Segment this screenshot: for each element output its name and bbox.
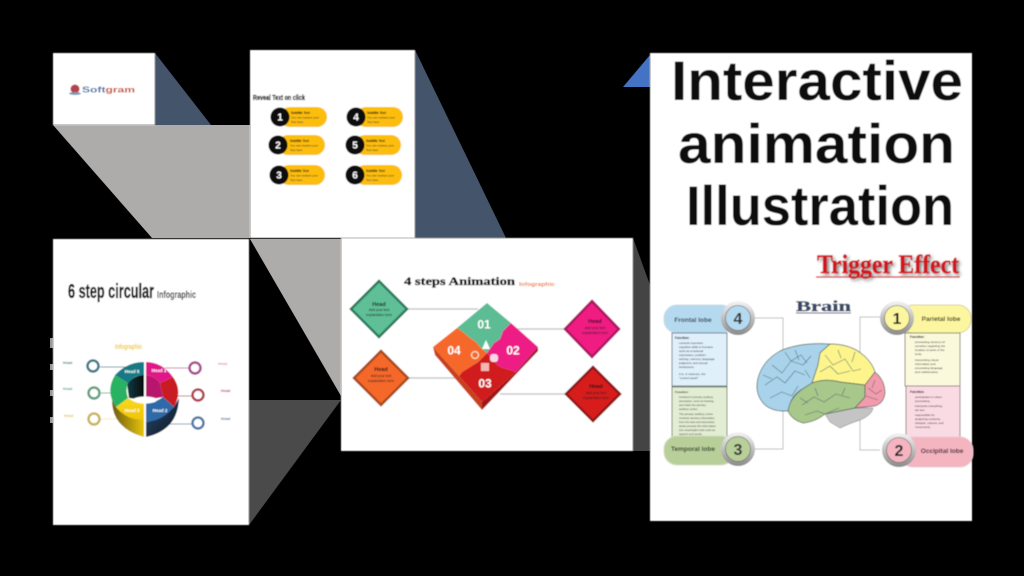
side labels: Head (63, 361, 73, 365)
panel: logo slide (53, 53, 155, 125)
step 1: Subtitle Text (291, 111, 311, 115)
side labels: Head (218, 362, 228, 366)
frontal lobe card: It is, in essence, the (679, 372, 706, 376)
connector shape: blue triangle (623, 55, 650, 87)
callout: red diamond: Add your text (586, 391, 606, 395)
temporal lobe card: and holds the primary (679, 403, 706, 407)
occipital lobe card: Function: (910, 390, 925, 394)
step 3: Subtitle Text (290, 169, 310, 173)
chart: central 4 part diamond: 03 (478, 376, 492, 390)
step 2: Text here (290, 148, 303, 152)
frontal lobe card: solving, memory, language (679, 357, 715, 361)
callout: orange diamond: explanation here (368, 379, 394, 383)
step 5: Subtitle Text (366, 139, 386, 143)
side labels: Head (64, 414, 74, 418)
step 2 (268, 135, 325, 155)
occipital lobe card: analyzing contents, (915, 417, 941, 421)
trigger effect subtitle: Trigger Effect (817, 250, 959, 279)
panel: interactive animation illustration (650, 49, 973, 521)
parietal lobe card: processing sensory inf (915, 340, 945, 344)
icon: logo globe (69, 84, 81, 95)
chart: 3D ring: Head 1 (152, 368, 167, 373)
occipital lobe card: processing (915, 399, 930, 403)
step 4: 4 (353, 112, 359, 124)
step 1 (270, 107, 327, 127)
parietal lobe card: location of parts of the (915, 348, 945, 352)
chart: 3D ring: Head 5 (125, 369, 140, 374)
callout: pink diamond: explanation here (582, 331, 608, 335)
step 6 (346, 165, 402, 185)
chart: central 4 part diamond (433, 303, 538, 410)
panel: 4 steps animation slide (341, 238, 633, 451)
occipital lobe card: 2 (895, 443, 904, 460)
step 1: You can replace your (291, 116, 319, 120)
chart: central 4 part diamond: 01 (477, 318, 491, 332)
callout: red diamond (566, 367, 620, 421)
title: animation (678, 112, 955, 175)
temporal lobe card: into meaningful units such as (679, 428, 716, 432)
occipital lobe card: participates in vision (915, 395, 942, 399)
callout: red diamond: Head (589, 384, 603, 390)
callout: orange diamond: Head (374, 367, 388, 373)
parietal lobe card: information and (915, 362, 936, 366)
step 3: Text here (290, 178, 303, 182)
temporal lobe card (664, 387, 755, 466)
title (671, 49, 963, 237)
heading: brain: Brain (796, 299, 852, 315)
callout: green diamond: explanation here (366, 313, 392, 317)
temporal lobe card: 3 (734, 442, 743, 459)
illustration: brain (757, 344, 885, 428)
step 1: 1 (277, 112, 283, 124)
step 6: Subtitle Text (366, 169, 386, 173)
connector lines (755, 317, 880, 450)
parietal lobe card: body (915, 352, 922, 356)
step 4: You can replace your (367, 116, 395, 120)
frontal lobe card: 4 (734, 311, 743, 328)
chart: 3D ring: Head 3 (125, 408, 140, 413)
step 4: Subtitle Text (367, 111, 387, 115)
connector shape: gray triangle (250, 239, 341, 396)
callout: green diamond: Head (372, 302, 386, 308)
side labels (63, 361, 231, 421)
chart: central 4 part diamond: 04 (447, 344, 461, 358)
callout: orange diamond (354, 351, 408, 405)
temporal lobe card: Temporal lobe (671, 446, 715, 453)
step 6: Text here (366, 178, 379, 182)
heading: brain (796, 299, 852, 315)
title: Interactive (671, 49, 963, 112)
panel: 6 step circular slide (53, 239, 249, 525)
step 3: 3 (276, 170, 282, 182)
step 5: Text here (366, 148, 379, 152)
heading: 6 step circular: 6 step circular (68, 281, 154, 303)
frontal lobe card: expression, problem (679, 353, 707, 357)
temporal lobe card: Involved in primary auditory (679, 395, 714, 399)
logo wordmark: Soft gram (82, 86, 135, 94)
connector shape: gray band (53, 125, 250, 238)
step 2: Subtitle Text (290, 139, 310, 143)
parietal lobe card: ormation regarding the (915, 344, 946, 348)
frontal lobe card: controls important (679, 341, 703, 345)
temporal lobe card: Function: (675, 390, 689, 394)
frontal lobe card: Frontal lobe (674, 317, 712, 324)
chart: 3D ring: Head 2 (153, 408, 168, 413)
callout: red diamond: explanation here (583, 396, 609, 400)
icon badges (88, 360, 204, 428)
temporal lobe card: areas process the information (679, 424, 716, 428)
parietal lobe card: Parietal lobe (922, 316, 961, 323)
temporal lobe card: receives sensory information (679, 416, 715, 420)
callout: pink diamond (565, 301, 619, 357)
leader lines (100, 367, 192, 424)
heading: 4 steps animation: 4 steps Animation (404, 274, 515, 288)
callout: pink diamond: Add your text (585, 326, 605, 330)
occipital lobe card: responsible for (915, 413, 935, 417)
parietal lobe card: and mathematics. (915, 370, 939, 374)
step 1: Text here (291, 120, 304, 124)
connector lines (405, 309, 567, 394)
callout: green diamond: Add your text (369, 308, 389, 312)
temporal lobe card: The primary auditory cortex (679, 412, 714, 416)
connector shape: dark gray right of steps slide (633, 238, 650, 451)
occipital lobe card (882, 386, 973, 467)
occipital lobe card: (shapes, colours, and (915, 421, 944, 425)
frontal lobe card: cognitive skills in humans (679, 345, 713, 349)
callout: pink diamond: Head (588, 319, 602, 325)
connector shape: slate from reveal slide (415, 50, 506, 238)
frontal lobe card: such as emotional (679, 349, 704, 353)
title: Illustration (686, 174, 954, 237)
frontal lobe card: "control panel" (679, 376, 698, 380)
label: yellow infographic: Infographic (115, 344, 142, 351)
parietal lobe card (880, 301, 971, 386)
occipital lobe card: Occipital lobe (921, 448, 964, 455)
step 3: You can replace your (290, 174, 318, 178)
step 5: You can replace your (366, 144, 394, 148)
heading: small infographic: Infographic (157, 290, 196, 301)
occipital lobe card: we see (915, 408, 925, 412)
step 4 (346, 107, 403, 127)
step 5: 5 (352, 140, 358, 152)
chart: central 4 part diamond: 02 (506, 344, 520, 358)
parietal lobe card: interpreting visual (915, 358, 939, 362)
chart: 3D ring (110, 362, 179, 437)
step 4: Text here (367, 120, 380, 124)
frontal lobe card: judgment, and sexual (678, 361, 708, 365)
connector shape: slate from logo slide (155, 53, 211, 125)
frontal lobe card: Function: (675, 336, 690, 340)
heading: infographic accent: Infographic (519, 282, 555, 288)
panel: reveal text slide (250, 50, 415, 238)
connector shape: dark gray wedge (249, 400, 341, 525)
ghost text behind circular slide (50, 338, 53, 423)
parietal lobe card: 1 (893, 311, 902, 328)
step 5 (346, 135, 401, 155)
frontal lobe card: behaviours. (679, 365, 695, 369)
callout: green diamond (351, 281, 407, 337)
temporal lobe card: speech and words. (679, 432, 703, 436)
step 2: 2 (275, 140, 281, 152)
trigger effect subtitle: Trigger Effect (819, 252, 961, 281)
step 6: You can replace your (366, 174, 394, 178)
side labels: Head (221, 417, 231, 421)
side labels: Head (221, 389, 231, 393)
temporal lobe card: perception, such as hearing, (679, 399, 714, 403)
parietal lobe card: Function: (910, 335, 925, 339)
parietal lobe card: processing language (915, 366, 943, 370)
step 6: 6 (352, 170, 358, 182)
callout: orange diamond: Add your text (371, 374, 391, 378)
side labels: Head (63, 387, 73, 391)
frontal lobe card (664, 301, 755, 386)
step 3 (270, 165, 325, 185)
temporal lobe card: from the ears and secondary (679, 420, 715, 424)
occipital lobe card: movement). (915, 425, 931, 429)
heading: reveal text: Reveal Text on click (253, 95, 305, 102)
occipital lobe card: interprets everything (915, 404, 943, 408)
temporal lobe card: auditory cortex. (679, 407, 698, 411)
step 2: You can replace your (290, 144, 318, 148)
